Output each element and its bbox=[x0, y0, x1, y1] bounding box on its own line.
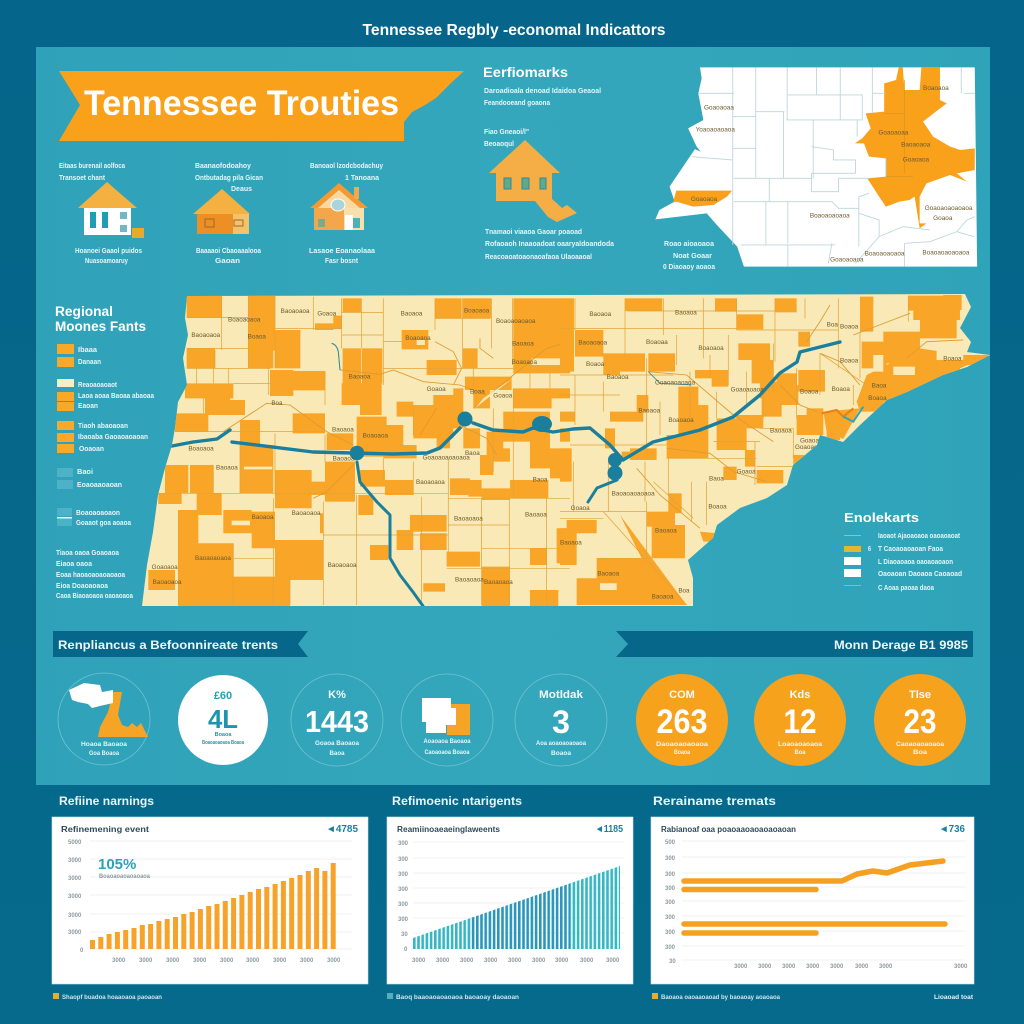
chart 1: orange bars: 3000 bbox=[68, 894, 82, 900]
chart 1: orange bars: 3000 bbox=[193, 958, 207, 964]
legend: enolekarts: 6 bbox=[868, 546, 871, 553]
map county labels: Boaoaoaoaoa bbox=[496, 318, 536, 325]
banner: Tennessee Trouties: Tennessee Trouties bbox=[84, 84, 399, 123]
chart 3: orange lines: 300 bbox=[665, 930, 676, 936]
map county labels: Boa bbox=[271, 400, 283, 407]
chart 2: teal stripe bars: 3000 bbox=[508, 958, 522, 964]
map county labels: Baoaoa bbox=[525, 512, 547, 519]
map west half counties bbox=[148, 296, 570, 607]
chart 1: orange bars: 3000 bbox=[273, 958, 287, 964]
stat circle 2: white 4L bbox=[178, 675, 268, 765]
legend: enolekarts: C Aoaa paoaa daoa bbox=[878, 585, 934, 592]
stat circle 1: map icon: Hoaoa Baoaoa bbox=[81, 742, 128, 748]
chart 2: teal stripe bars: 300 bbox=[398, 872, 409, 878]
map county labels: Baoaoa bbox=[252, 514, 274, 521]
chart heading 1: Refiine narnings bbox=[59, 794, 154, 808]
map county labels: Boaoa bbox=[868, 395, 887, 402]
chart 3 footer: Baoaoa oaoaaoaoad by baoaoay aoaoaoa bbox=[661, 994, 780, 1001]
text block: benchmarks with house: Noat Goaar bbox=[673, 253, 712, 260]
chart 1: orange bars: 3000 bbox=[300, 958, 314, 964]
map county labels: Goaoaoa bbox=[795, 444, 821, 451]
chart 1: orange bars: Refinemening event bbox=[61, 825, 149, 834]
chart 3: orange lines bbox=[651, 817, 974, 984]
chart 3: orange lines: 3000 bbox=[954, 964, 968, 970]
chart 3: orange lines: ◄736 bbox=[939, 824, 965, 835]
map county labels: Goaoaoaoa bbox=[731, 386, 764, 393]
text block: benchmarks with house: Tnamaoi viaaoa Gaoar poaoad bbox=[485, 229, 582, 236]
map county labels: Goaoa bbox=[800, 437, 819, 444]
map county labels: Boaoa bbox=[840, 323, 859, 330]
house item 2: Baaaaoi Cbaoaaalooa bbox=[196, 248, 261, 255]
legend: regional moones fants: Baoi bbox=[77, 469, 93, 476]
map county labels: Baoaoa bbox=[512, 341, 534, 348]
stat circle 7: 12: Loaoaoaoaoa bbox=[778, 742, 823, 748]
legend: regional moones fants: Ibaoaba Gaoaoaoaoan bbox=[78, 434, 148, 441]
stat circle 5: 3: Motldak bbox=[539, 689, 584, 701]
legend: regional moones fants: Danaan bbox=[78, 359, 101, 366]
legend: enolekarts bbox=[844, 510, 962, 592]
map: white locator map: Goaoaoaoa bbox=[830, 256, 864, 263]
map county labels: Boaoa bbox=[586, 361, 605, 368]
chart 1 footer: Shaopf buadoa hoaaoaoa paoaoan bbox=[62, 994, 162, 1001]
chart 3: orange lines: 3000 bbox=[879, 964, 893, 970]
map county labels: Baoaoaoa bbox=[578, 339, 608, 346]
stat circle 7: 12: Kds bbox=[790, 689, 810, 701]
map county labels: Boaoaoa bbox=[668, 417, 694, 424]
map county labels: Baoaoaoaoa bbox=[195, 555, 231, 562]
map county labels: Boaoa bbox=[248, 333, 266, 340]
legend: regional moones fants: Eiaoa oaoa bbox=[56, 561, 92, 568]
map county labels: Baoaoa bbox=[652, 593, 674, 600]
chart 1: orange bars: ◄4785 bbox=[326, 824, 358, 835]
map county labels: Boaoaa bbox=[646, 339, 668, 346]
chart 3: orange lines: 3000 bbox=[734, 964, 748, 970]
chart 2: teal stripe bars: 300 bbox=[398, 857, 409, 863]
map county labels: Baoaoaoa bbox=[328, 562, 357, 569]
stat circle 5: 3 bbox=[515, 674, 607, 766]
legend: regional moones fants: Tiaoa oaoa Goaoaoa bbox=[56, 550, 119, 557]
map county labels: Goaoa bbox=[737, 469, 756, 476]
chart 1: orange bars: 3000 bbox=[139, 958, 153, 964]
title: Tennessee Regbly -economal Indicattors bbox=[362, 22, 666, 39]
chart 2: teal stripe bars: 300 bbox=[398, 841, 409, 847]
chart 3: orange lines: 500 bbox=[665, 840, 676, 846]
stat circle 2: white 4L: £60 bbox=[214, 690, 232, 702]
house item 1 bbox=[59, 163, 144, 265]
house item 1: Hoanoei Gaaol puidos bbox=[75, 248, 142, 255]
map: white locator map: Boaoaoaoaoaoa bbox=[922, 249, 970, 256]
map county labels: Goaoa bbox=[427, 386, 446, 393]
map county labels: Goaoaoaoaoaoa bbox=[423, 455, 470, 462]
map: white locator map: Goaoa bbox=[933, 215, 953, 222]
stat circle 3: 1443: K% bbox=[328, 689, 346, 701]
map: white locator map: Boaoaoaoaoa bbox=[865, 250, 905, 257]
map county labels: Boaoa bbox=[832, 386, 850, 393]
map county labels: Baoaoaoa bbox=[455, 577, 484, 584]
house item 2: Baanaofodoahoy bbox=[195, 163, 251, 170]
house item 2: Deaus bbox=[231, 186, 252, 193]
house item 3: Banoaol lzodcbodachuy bbox=[310, 163, 383, 170]
stat circle 8: 23 bbox=[874, 674, 966, 766]
chart 1: orange bars: 3000 bbox=[68, 913, 82, 919]
stat circle 7: 12: 12 bbox=[784, 703, 816, 741]
chart 3: orange lines: 3000 bbox=[758, 964, 772, 970]
map: white locator map: Baoaoaoa bbox=[901, 142, 931, 149]
map county labels bbox=[152, 308, 962, 600]
stat circle 5: 3: Aoa aoaoaoaoaoa bbox=[536, 741, 587, 747]
map county labels: Boaoa bbox=[943, 356, 962, 363]
map: white locator map: Boaoaoa bbox=[923, 85, 949, 92]
map: white locator map: Goaoaoaa bbox=[704, 104, 734, 111]
map county labels: Goaoa bbox=[571, 505, 590, 512]
ribbon heading right bbox=[616, 631, 973, 657]
map: white locator map: Goaoaoaa bbox=[878, 129, 909, 136]
house item 3 bbox=[309, 163, 383, 265]
chart 3: orange lines: 3000 bbox=[830, 964, 844, 970]
chart 1: orange bars: 3000 bbox=[68, 876, 82, 882]
legend: regional moones fants bbox=[55, 304, 154, 600]
map county labels: Baoaoaoa bbox=[153, 579, 182, 586]
legend: regional moones fants: Reaoaoaoaot bbox=[78, 382, 118, 389]
legend: regional moones fants: Eoaoaaoaoan bbox=[77, 482, 122, 489]
chart heading 3: Rerainame tremats bbox=[653, 794, 776, 808]
map county labels: Baoaoaoa bbox=[454, 516, 483, 523]
house item 2: Gaoan bbox=[215, 258, 240, 265]
legend: regional moones fants: Tiaoh abaoaoan bbox=[78, 423, 128, 430]
map county labels: Boaoaoa bbox=[188, 445, 214, 452]
chart 1: orange bars: 105% bbox=[98, 856, 136, 873]
chart 3 footer bbox=[652, 993, 974, 1001]
map county labels: Baoaoa bbox=[333, 455, 355, 462]
chart 1: orange bars: 3000 bbox=[68, 930, 82, 936]
chart 1: orange bars: 0 bbox=[80, 948, 84, 954]
legend: regional moones fants: Ooaoan bbox=[79, 446, 104, 453]
map: white locator map: Yoaoaoaoaoa bbox=[696, 127, 735, 134]
chart 2: teal stripe bars: 300 bbox=[398, 887, 409, 893]
ribbon heading left bbox=[53, 631, 308, 657]
chart 3: orange lines: 3000 bbox=[782, 964, 796, 970]
chart 2: teal stripe bars: 3000 bbox=[555, 958, 569, 964]
text block: benchmarks with house: 0 Diaoaoy aoaoa bbox=[663, 264, 715, 271]
map county labels: Boaoaoa bbox=[512, 359, 537, 366]
map county labels: Baoa bbox=[465, 450, 480, 457]
chart 2: teal stripe bars: 300 bbox=[398, 902, 409, 908]
stat circle 1: map icon: Goa Boaoa bbox=[89, 751, 120, 757]
map county labels: Baoaoa bbox=[675, 309, 697, 316]
stat circle 6: 263: COM bbox=[669, 689, 695, 701]
banner: Tennessee Trouties bbox=[59, 71, 464, 141]
legend: regional moones fants: Eioa Doaoaoaoa bbox=[56, 583, 108, 590]
chart 3: orange lines: 300 bbox=[665, 872, 676, 878]
chart 2: teal stripe bars: 3000 bbox=[580, 958, 594, 964]
chart 2 footer: Baoq baaoaoaoaoaoa baoaoay daoaoan bbox=[396, 994, 519, 1001]
map county labels: Baoaoa bbox=[332, 426, 354, 433]
house item 2: Ontbutadag pila Gican bbox=[195, 175, 263, 182]
chart 1: orange bars: Boaoaoaoaoaoaoa bbox=[99, 874, 151, 880]
chart 1: orange bars: 3000 bbox=[220, 958, 234, 964]
text block: benchmarks with house: Rofaoaoh Inaaoadoat oaaryaldoandoda bbox=[485, 241, 614, 248]
map county labels: Baoaoaoa bbox=[484, 579, 513, 586]
house item 3: Lasaoe Eoanaolaaa bbox=[309, 248, 375, 255]
legend: regional moones fants: Boaoaoaoaon bbox=[76, 510, 120, 517]
stat circle 6: 263: Boaoa bbox=[674, 750, 691, 756]
stat circle 7: 12: Boa bbox=[794, 750, 806, 756]
chart 1: orange bars: 3000 bbox=[246, 958, 260, 964]
chart 1: orange bars: 3000 bbox=[112, 958, 126, 964]
chart 1: orange bars bbox=[52, 817, 368, 984]
stat circle 2: white 4L: 4L bbox=[208, 704, 238, 734]
chart 3 footer: Lioaoad toat bbox=[934, 994, 974, 1001]
chart 3: orange lines: 3000 bbox=[855, 964, 869, 970]
map county labels: Baoaoa bbox=[349, 373, 371, 380]
map county labels: Baoaoaoaoaoa bbox=[612, 490, 655, 497]
stat circle 8: 23: Caoaoaoaoaoa bbox=[896, 742, 945, 748]
house item 1: Transoet chant bbox=[59, 175, 106, 182]
chart 2: teal stripe bars bbox=[387, 817, 633, 984]
map county labels: Boaoa bbox=[840, 358, 859, 365]
legend: regional moones fants: Caoa Biaoaoaoa oaoaoaoa bbox=[56, 593, 133, 600]
map county labels: Goaoa bbox=[317, 310, 337, 317]
stat circle 3: 1443: 1443 bbox=[305, 704, 369, 739]
stat circle 4: building icon: Caoaoaoa Boaoa bbox=[424, 750, 470, 756]
bars bbox=[90, 863, 336, 949]
legend: regional moones fants: Eoaa haoaoaoaoaoaoa bbox=[56, 572, 125, 579]
map county labels: Baoaoaoa bbox=[292, 510, 321, 517]
stat circle 3: 1443 bbox=[291, 674, 383, 766]
map county labels: Baoaoa bbox=[770, 428, 792, 435]
map county labels: Boa bbox=[678, 587, 690, 594]
text block: benchmarks with house bbox=[483, 65, 715, 271]
chart 3: orange lines: 30 bbox=[669, 959, 676, 965]
chart 2: teal stripe bars: 3000 bbox=[412, 958, 426, 964]
stat circle 4: building icon bbox=[401, 674, 493, 766]
map county labels: Boa bbox=[827, 321, 838, 328]
chart 3: orange lines: 300 bbox=[665, 900, 676, 906]
chart 1: orange bars: 3000 bbox=[327, 958, 341, 964]
stat circle 6: 263 bbox=[636, 674, 728, 766]
house item 3: 1 Tanoana bbox=[345, 175, 379, 182]
chart 2: teal stripe bars: 3000 bbox=[532, 958, 546, 964]
map county labels: Goaoaoa bbox=[152, 564, 178, 571]
map county labels: Baoaoa bbox=[401, 310, 423, 317]
map county labels: Goaoa bbox=[493, 393, 513, 400]
map: white locator map: Goaoaoa bbox=[903, 157, 930, 164]
map county labels: Boaoaoa bbox=[698, 345, 724, 352]
chart 2: teal stripe bars: 0 bbox=[404, 947, 408, 953]
chart 1: orange bars: 3000 bbox=[166, 958, 180, 964]
stat circle 5: 3: Boaoa bbox=[551, 751, 572, 757]
ribbon heading left: Renpliancus a Befoonnireate trents bbox=[58, 638, 278, 652]
map county labels: Boaoaoa bbox=[464, 308, 490, 315]
map: white locator map: Boaoaoaoaoa bbox=[810, 213, 850, 220]
river and highway lines bbox=[172, 342, 840, 606]
chart 2: teal stripe bars: 30 bbox=[401, 932, 408, 938]
house item 1: Eitaas burenail aolfoca bbox=[59, 163, 125, 170]
map: Tennessee county choropleth bbox=[130, 285, 1000, 615]
map county labels: Baoaoaoa bbox=[191, 332, 221, 339]
map county labels: Baoaoaoa bbox=[416, 479, 445, 486]
map county labels: Baoa bbox=[533, 477, 548, 484]
text block: benchmarks with house: Daroadioala denoad Idaidoa Geaoal bbox=[484, 88, 601, 95]
map county labels: Baoaoaoa bbox=[281, 308, 310, 315]
chart 3: orange lines: 300 bbox=[665, 945, 676, 951]
map: white locator map: Goaoaoaoaoaoa bbox=[925, 205, 973, 212]
stat circle 2: white 4L: Boaoaoaoaoa Boaoa bbox=[202, 740, 245, 746]
stat circle 5: 3: 3 bbox=[552, 704, 570, 740]
line series bbox=[684, 861, 945, 933]
stat circle 8: 23: Tlse bbox=[909, 689, 931, 701]
stat circle 3: 1443: Baoa bbox=[330, 751, 345, 757]
map county labels: Boaoaoa bbox=[363, 432, 388, 439]
map county labels: Boaoa bbox=[708, 503, 727, 510]
bars bbox=[413, 866, 620, 949]
legend: regional moones fants: Moones Fants bbox=[55, 319, 146, 334]
chart 2: teal stripe bars: 3000 bbox=[460, 958, 474, 964]
map county labels: Baoaoa bbox=[589, 311, 612, 318]
legend: enolekarts: Enolekarts bbox=[844, 510, 919, 525]
stat circle 6: 263: Daoaoaoaoaoa bbox=[656, 742, 709, 748]
text block: benchmarks with house: Fiao Gneaoi/l" bbox=[484, 129, 529, 136]
stat circle 7: 12 bbox=[754, 674, 846, 766]
chart 3: orange lines: 300 bbox=[665, 886, 676, 892]
stat circle 4: building icon: Aoaoaoa Baoaoa bbox=[424, 739, 471, 745]
chart 3: orange lines: 300 bbox=[665, 915, 676, 921]
map county labels: Baoa bbox=[872, 383, 887, 390]
map county labels: Baoaoa bbox=[560, 539, 582, 546]
stat circle 1: map icon bbox=[58, 673, 150, 765]
stat circle 8: 23: Boa bbox=[913, 750, 928, 756]
chart 2: teal stripe bars: Reamiinoaeaeinglaweents bbox=[397, 825, 501, 834]
legend: regional moones fants: Eaoan bbox=[78, 403, 98, 410]
chart 2: teal stripe bars: 3000 bbox=[606, 958, 620, 964]
text block: benchmarks with house: Roao aioaoaoa bbox=[664, 241, 714, 248]
chart 1: orange bars: 5000 bbox=[68, 840, 82, 846]
chart 1: orange bars: 3000 bbox=[68, 858, 82, 864]
stat circle 3: 1443: Goaoa Baoaoa bbox=[315, 741, 360, 747]
legend: enolekarts: T Caoaoaoaoan Faoa bbox=[878, 546, 943, 553]
house item 2 bbox=[193, 163, 263, 265]
legend: enolekarts: Oaoaoan Daoaoa Caoaoad bbox=[878, 571, 962, 578]
text block: benchmarks with house: Feandooeand goaona bbox=[484, 100, 550, 107]
house item 3: Fasr bosnt bbox=[325, 258, 359, 265]
map county labels: Boaoaoa bbox=[405, 335, 431, 342]
map county labels: Boaoaoaoa bbox=[228, 317, 261, 324]
map: white locator map bbox=[655, 67, 977, 267]
map county labels: Baoa bbox=[709, 476, 724, 483]
legend: regional moones fants: Regional bbox=[55, 304, 113, 319]
chart 2: teal stripe bars: 3000 bbox=[436, 958, 450, 964]
stat circle 6: 263: 263 bbox=[656, 703, 708, 741]
legend: enolekarts: L Diaoaoaoa oaoaoaoaon bbox=[878, 559, 953, 566]
stat circle 2: white 4L: Boaoa bbox=[215, 732, 232, 738]
chart 3: orange lines: 300 bbox=[665, 856, 676, 862]
stat circle 8: 23: 23 bbox=[904, 703, 936, 741]
map county labels: Baoaoa bbox=[607, 374, 629, 381]
map county labels: Baoaoa bbox=[216, 465, 238, 472]
map county labels: Boaoa bbox=[800, 388, 819, 395]
chart 3: orange lines: 3000 bbox=[806, 964, 820, 970]
chart 3: orange lines: Rabianoaf oaa poaoaaoaoaoaoaoan bbox=[661, 825, 796, 834]
ribbon heading right: Monn Derage B1 9985 bbox=[834, 638, 968, 652]
map county labels: Baoaoa bbox=[655, 527, 677, 534]
chart 2: teal stripe bars: ◄1185 bbox=[595, 824, 623, 835]
chart 2: teal stripe bars: 300 bbox=[398, 917, 409, 923]
chart heading 2: Refimoenic ntarigents bbox=[392, 794, 522, 808]
map county labels: Baoaoa bbox=[597, 570, 620, 577]
map: white locator map: Goaoaoa bbox=[691, 196, 718, 203]
legend: regional moones fants: Goaaot goa aoaoa bbox=[76, 520, 131, 527]
legend: regional moones fants: Laoa aoaa Baoaa abaoaa bbox=[78, 393, 154, 400]
chart 2: teal stripe bars: 3000 bbox=[484, 958, 498, 964]
house item 1: Nuasoamoaruy bbox=[85, 258, 128, 265]
legend: enolekarts: Iaoaot Ajaoaoaoa oaoaoaoat bbox=[878, 533, 961, 540]
map county labels: Baoaoa bbox=[638, 407, 661, 414]
text block: benchmarks with house: Beoaoqul bbox=[484, 141, 514, 148]
icon: large house with state tail bbox=[489, 140, 577, 222]
legend: regional moones fants: Ibaaa bbox=[78, 347, 97, 354]
map county labels: Boaa bbox=[470, 388, 485, 395]
map east half counties bbox=[560, 295, 988, 605]
map county labels: Goaoaoaoaoa bbox=[655, 379, 696, 386]
text block: benchmarks with house: Eerfiomarks bbox=[483, 65, 568, 80]
panel: main teal panel bbox=[36, 47, 990, 785]
text block: benchmarks with house: Reacoaoatoaonaoafaoa Ulaoaaoal bbox=[485, 254, 592, 261]
